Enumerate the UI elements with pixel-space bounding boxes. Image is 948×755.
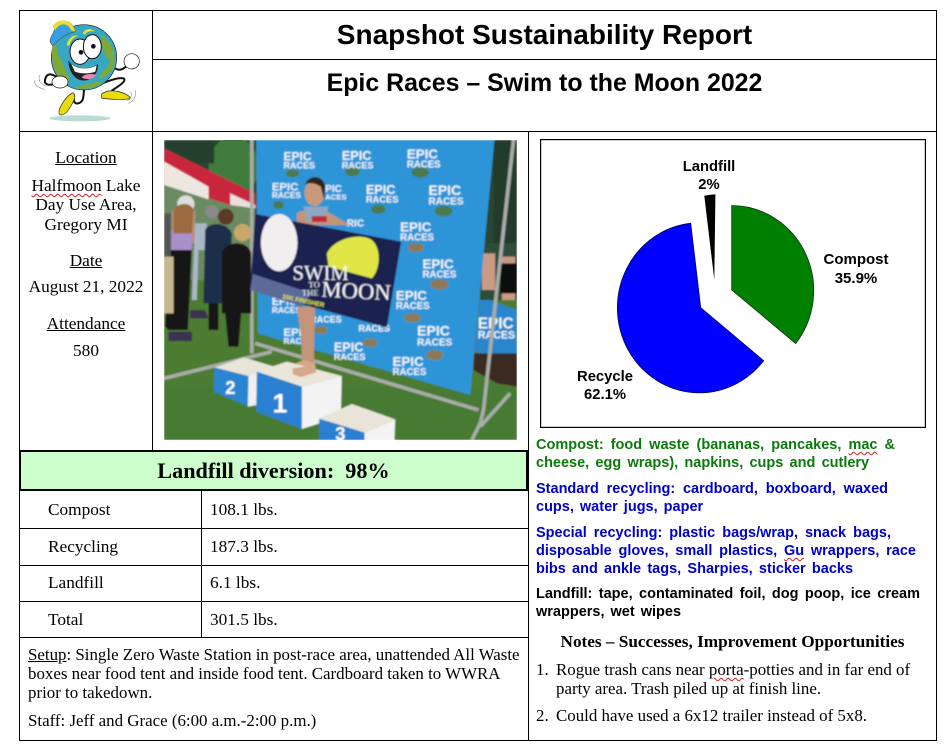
backdrop logos: RACES bbox=[366, 194, 398, 204]
landfill diversion banner: Landfill diversion: 98% bbox=[157, 458, 390, 483]
backdrop logos: RACES bbox=[400, 233, 435, 244]
backdrop logos: RACES bbox=[310, 315, 342, 325]
date text: August 21, 2022 bbox=[29, 277, 143, 296]
backdrop logos: RACES bbox=[396, 301, 430, 312]
photo: race finisher on podium with banner: 2 bbox=[225, 377, 236, 398]
staff line: Staff: Jeff and Grace (6:00 a.m.-2:00 p.m.) bbox=[28, 711, 316, 730]
legend: landfill: wrappers, wet wipes bbox=[536, 604, 681, 620]
location text: Day Use Area, bbox=[35, 195, 137, 214]
backdrop logos: RACES bbox=[334, 352, 365, 362]
backdrop logos: RACES bbox=[428, 196, 464, 207]
label: compost: 35.9% bbox=[835, 270, 877, 287]
photo: race finisher on podium with banner: 1 bbox=[272, 389, 288, 419]
event details bbox=[28, 148, 143, 360]
backdrop logos: EPIC bbox=[392, 354, 424, 369]
notes heading: Notes – Successes, Improvement Opportunities bbox=[561, 632, 904, 651]
legend: compost bbox=[536, 437, 895, 471]
backdrop logos: RACES bbox=[392, 367, 427, 378]
backdrop logos: PIC bbox=[325, 184, 342, 195]
backdrop logos: RACES bbox=[284, 336, 313, 346]
note 1 bbox=[536, 660, 910, 698]
backdrop logos: EPIC bbox=[284, 150, 312, 164]
backdrop logos: EPIC bbox=[400, 220, 431, 235]
legend: standard recycling: Standard recycling: cardboard, boxboard, waxed bbox=[536, 481, 888, 497]
row: recycling: Recycling bbox=[48, 537, 118, 556]
photo: race finisher on podium with banner: TO bbox=[309, 279, 320, 289]
backdrop logos bbox=[272, 146, 515, 378]
photo: race finisher on podium with banner: SWIM bbox=[293, 263, 349, 285]
row: compost: Compost bbox=[48, 500, 110, 519]
subtitle: Epic Races – Swim to the Moon 2022 bbox=[327, 69, 762, 97]
note 1: party area. Trash piled up at finish line. bbox=[556, 679, 821, 698]
legend: compost: cheese, egg wraps), napkins, cups and cutlery bbox=[536, 455, 869, 471]
location heading: Location bbox=[55, 148, 117, 167]
slice: compost bbox=[732, 206, 814, 344]
legend: special recycling: Special recycling: plastic bags/wrap, snack bags, bbox=[536, 525, 891, 541]
legend: special recycling: bibs and ankle tags, Sharpies, sticker backs bbox=[536, 561, 853, 577]
legend: special recycling: disposable gloves, small plastics, Gu wrappers, race bbox=[536, 543, 916, 559]
location text bbox=[32, 176, 140, 234]
location text: Halfmoon Lake bbox=[32, 176, 140, 195]
title: Snapshot Sustainability Report bbox=[337, 19, 752, 50]
row: total: 301.5 lbs. bbox=[210, 610, 278, 629]
row: total bbox=[48, 610, 278, 629]
landfill diversion banner bbox=[19, 450, 528, 491]
setup notes bbox=[28, 645, 520, 730]
legend: landfill bbox=[536, 586, 920, 620]
attendance number: 580 bbox=[73, 341, 99, 360]
legend: compost: Compost: food waste (bananas, pancakes, mac & bbox=[536, 437, 895, 453]
note 2: 2. bbox=[536, 706, 549, 725]
row: compost: 108.1 lbs. bbox=[210, 500, 278, 519]
label: recycle: 62.1% bbox=[584, 387, 626, 403]
backdrop logos: EPIC bbox=[428, 182, 461, 198]
row: landfill bbox=[48, 573, 260, 592]
row: compost bbox=[48, 500, 278, 519]
backdrop logos: EPIC bbox=[366, 183, 395, 197]
pie chart: waste share bbox=[540, 139, 926, 428]
attendance heading: Attendance bbox=[47, 314, 125, 333]
photo: race finisher on podium with banner: 10K FINISHER bbox=[281, 293, 325, 309]
photo: race finisher on podium with banner bbox=[164, 140, 517, 440]
note 1: Rogue trash cans near porta-potties and in far end of bbox=[556, 660, 910, 679]
legend: standard recycling: cups, water jugs, paper bbox=[536, 499, 703, 515]
backdrop logos: RACES bbox=[407, 159, 441, 170]
label: compost: Compost bbox=[824, 251, 888, 268]
backdrop logos: RACES bbox=[358, 324, 390, 334]
row: recycling bbox=[48, 537, 278, 556]
location text: Gregory MI bbox=[44, 215, 128, 234]
label: landfill: Landfill bbox=[683, 159, 735, 175]
backdrop logos: EPIC bbox=[417, 323, 450, 339]
waste weights table bbox=[48, 500, 278, 629]
row: landfill: 6.1 lbs. bbox=[210, 573, 260, 592]
backdrop logos: EPIC bbox=[342, 149, 371, 163]
legend: standard recycling bbox=[536, 481, 888, 515]
backdrop logos: EPIC bbox=[422, 256, 454, 271]
setup line 3: prior to takedown. bbox=[28, 683, 152, 702]
legend: landfill: Landfill: tape, contaminated foil, dog poop, ice cream bbox=[536, 586, 920, 602]
backdrop logos: RACES bbox=[422, 269, 457, 280]
row: total: Total bbox=[48, 610, 83, 629]
backdrop logos: RACES bbox=[272, 190, 301, 200]
note 1: 1. bbox=[536, 660, 549, 679]
setup line 2: boxes near food tent and inside food tent. Cardboard taken to WWRA bbox=[28, 664, 501, 683]
photo: race finisher on podium with banner: THE bbox=[302, 287, 319, 297]
backdrop logos: RACES bbox=[417, 337, 453, 348]
date heading: Date bbox=[70, 251, 102, 270]
label: recycle: Recycle bbox=[577, 369, 633, 385]
backdrop logos: RACES bbox=[342, 160, 373, 170]
note 2: Could have used a 6x12 trailer instead of 5x8. bbox=[556, 706, 867, 725]
backdrop logos: RIC bbox=[347, 219, 364, 230]
backdrop logos: RACES bbox=[272, 305, 301, 315]
backdrop logos: EPIC bbox=[272, 296, 297, 308]
label: landfill: 2% bbox=[698, 177, 720, 193]
backdrop logos: EPIC bbox=[334, 341, 363, 355]
backdrop logos: EPIC bbox=[284, 327, 310, 339]
backdrop logos: RACES bbox=[284, 161, 315, 171]
backdrop logos: ACES bbox=[325, 193, 346, 202]
backdrop logos: EPIC bbox=[407, 146, 438, 161]
icon: running globe mascot bbox=[34, 20, 140, 122]
legend: special recycling bbox=[536, 525, 916, 577]
slice: landfill bbox=[704, 194, 715, 280]
backdrop logos: EPIC bbox=[478, 315, 514, 332]
row: recycling: 187.3 lbs. bbox=[210, 537, 278, 556]
photo: race finisher on podium with banner: MOON bbox=[321, 277, 391, 305]
backdrop logos: EPIC bbox=[272, 181, 298, 193]
slice: recycle bbox=[617, 223, 764, 393]
row: landfill: Landfill bbox=[48, 573, 104, 592]
setup line 1: Setup: Single Zero Waste Station in post-race area, unattended All Waste bbox=[28, 645, 520, 664]
backdrop logos: RACES bbox=[478, 329, 515, 341]
backdrop logos: EPIC bbox=[396, 288, 427, 303]
